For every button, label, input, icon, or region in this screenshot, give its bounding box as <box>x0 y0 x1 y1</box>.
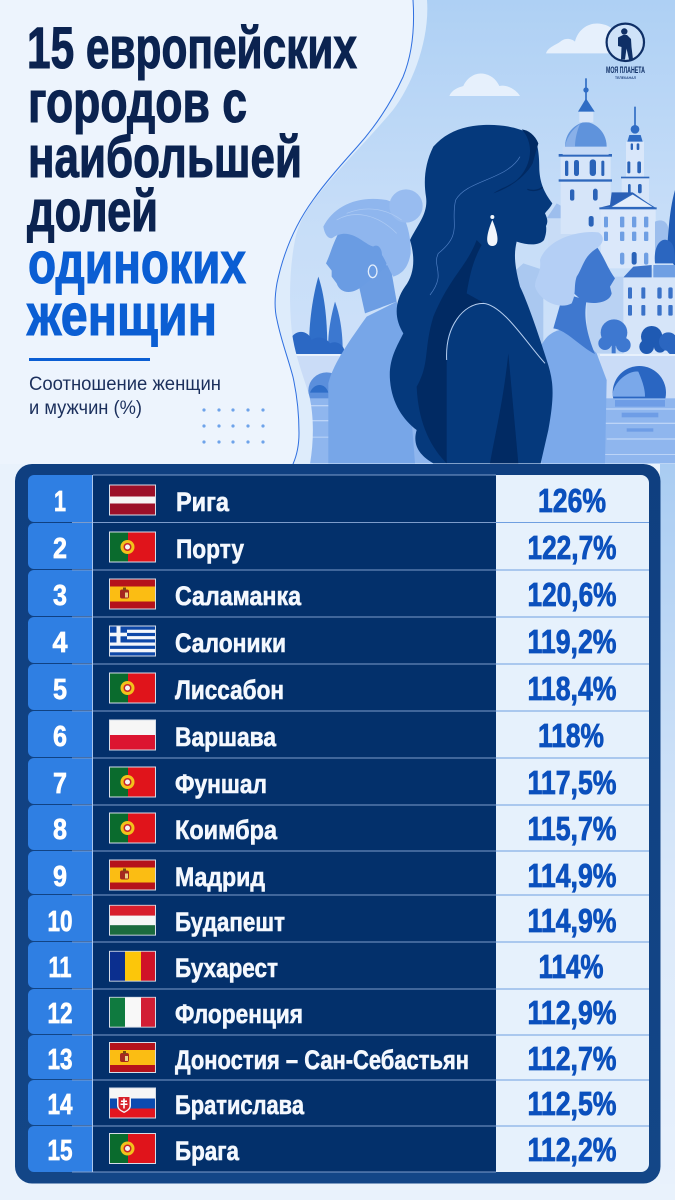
city: Варшава: Варшава <box>175 722 277 752</box>
flag: Romania <box>109 951 156 982</box>
rank 3 <box>28 570 92 616</box>
clouds <box>449 24 643 96</box>
rank 12 <box>28 989 92 1034</box>
city: Саламанка: Саламанка <box>175 581 302 611</box>
right woman <box>535 232 615 463</box>
rank 3: 3 <box>53 580 67 612</box>
rank 9: 9 <box>53 861 67 893</box>
rank 11 <box>28 942 92 988</box>
rank 5 <box>28 664 92 710</box>
value: 112,7%: 112,7% <box>528 1040 616 1077</box>
value: 117,5%: 117,5% <box>528 764 616 801</box>
flag: Spain <box>109 578 156 610</box>
rank 4 <box>28 617 92 663</box>
row 10 <box>28 895 616 941</box>
logo: Моя планета: ТЕЛЕКАНАЛ <box>615 76 637 80</box>
flag: Spain <box>109 860 156 890</box>
city: Порту: Порту <box>176 534 244 564</box>
row 12 <box>28 989 616 1034</box>
rank 11: 11 <box>48 952 72 984</box>
rank 14 <box>28 1080 92 1125</box>
row 11 <box>28 942 604 988</box>
row 1 <box>28 475 606 522</box>
value: 112,2%: 112,2% <box>528 1131 616 1168</box>
logo: Моя планета: МОЯ ПЛАНЕТА <box>606 65 645 75</box>
flag: Poland <box>109 720 156 750</box>
flag: Spain <box>109 1042 156 1073</box>
flag: Hungary <box>109 905 156 936</box>
value: 120,6%: 120,6% <box>528 576 616 613</box>
value: 114,9%: 114,9% <box>528 857 616 894</box>
value: 114,9%: 114,9% <box>528 902 616 939</box>
rank 5: 5 <box>53 674 67 706</box>
rank 2 <box>28 523 92 569</box>
rank 8: 8 <box>53 814 67 846</box>
rank 1: 1 <box>54 486 66 518</box>
rank 9 <box>28 851 92 894</box>
rank 14: 14 <box>48 1089 72 1121</box>
bridges <box>290 354 675 419</box>
castle and distant buildings <box>508 78 675 357</box>
rank 13 <box>28 1035 92 1079</box>
row 15 <box>28 1126 616 1172</box>
flag: Slovakia <box>109 1088 156 1118</box>
flag: Portugal <box>109 812 156 844</box>
illustration: European city and three women silhouettes <box>0 0 675 464</box>
rank 6 <box>28 711 92 757</box>
row 3 <box>28 570 616 616</box>
subtitle: Соотношение женщин <box>29 374 221 395</box>
central woman <box>390 125 553 463</box>
value: 119,2%: 119,2% <box>528 623 616 660</box>
left woman <box>323 189 423 463</box>
rank 4: 4 <box>52 627 68 659</box>
flag: Portugal <box>109 766 156 798</box>
row 8 <box>28 805 616 850</box>
row 7 <box>28 758 616 804</box>
rank 2: 2 <box>53 533 67 565</box>
value: 112,9%: 112,9% <box>528 994 616 1031</box>
value: 122,7%: 122,7% <box>528 529 616 566</box>
city: Рига: Рига <box>176 487 230 517</box>
row 6 <box>28 711 604 757</box>
rank 13: 13 <box>48 1044 72 1076</box>
flag: Greece <box>109 626 156 656</box>
value: 126%: 126% <box>538 482 606 519</box>
value: 112,5%: 112,5% <box>528 1085 616 1122</box>
city: Будапешт: Будапешт <box>175 907 285 937</box>
city: Доностия – Сан-Себастьян: Доностия – Сан-Себастьян <box>175 1045 469 1075</box>
value: 115,7%: 115,7% <box>528 810 616 847</box>
flag: Italy <box>109 997 156 1028</box>
row 4 <box>28 617 616 663</box>
row 13 <box>28 1035 616 1079</box>
rank 15 <box>28 1126 92 1172</box>
city: Лиссабон: Лиссабон <box>175 675 284 705</box>
flag: Portugal <box>109 1133 156 1164</box>
row 9 <box>28 851 616 894</box>
rank 1 <box>28 475 92 522</box>
title: наибольшей <box>28 125 302 190</box>
value: 118%: 118% <box>538 717 604 754</box>
city: Мадрид: Мадрид <box>175 862 265 892</box>
flag: Portugal <box>109 532 156 562</box>
title <box>26 16 357 348</box>
row 14 <box>28 1080 616 1125</box>
title: долей <box>27 179 158 244</box>
title: женщин <box>26 283 217 348</box>
rank 7 <box>28 758 92 804</box>
row 2 <box>28 523 616 569</box>
title: городов с <box>28 70 247 135</box>
value: 114%: 114% <box>538 948 604 985</box>
city: Братислава: Братислава <box>175 1090 305 1120</box>
panel: ranking table <box>15 464 660 1184</box>
rank 10 <box>28 895 92 941</box>
city: Салоники: Салоники <box>175 628 286 658</box>
city: Фуншал: Фуншал <box>175 769 267 799</box>
flag: Latvia <box>109 484 156 516</box>
city: Брага: Брага <box>175 1136 240 1166</box>
curved pale band <box>0 0 427 464</box>
water <box>290 398 675 463</box>
city: Флоренция: Флоренция <box>175 999 303 1029</box>
row 5 <box>28 664 616 710</box>
title: 15 европейских <box>27 16 357 81</box>
rank 12: 12 <box>48 998 72 1030</box>
subtitle: и мужчин (%) <box>29 398 142 419</box>
rank 10: 10 <box>48 906 72 938</box>
title: одиноких <box>28 231 246 296</box>
left light area <box>0 0 414 464</box>
rank 15: 15 <box>48 1135 72 1167</box>
rank 7: 7 <box>53 768 67 800</box>
earring <box>487 215 497 246</box>
flag: Portugal <box>109 672 156 704</box>
city: Бухарест: Бухарест <box>175 953 278 983</box>
rank 6: 6 <box>53 721 67 753</box>
value: 118,4%: 118,4% <box>528 670 616 707</box>
logo: Моя планета <box>606 24 645 80</box>
trees <box>290 277 675 355</box>
rank 8 <box>28 805 92 850</box>
subtitle <box>29 374 221 419</box>
curved blue line <box>275 0 414 464</box>
city: Коимбра: Коимбра <box>175 815 278 845</box>
